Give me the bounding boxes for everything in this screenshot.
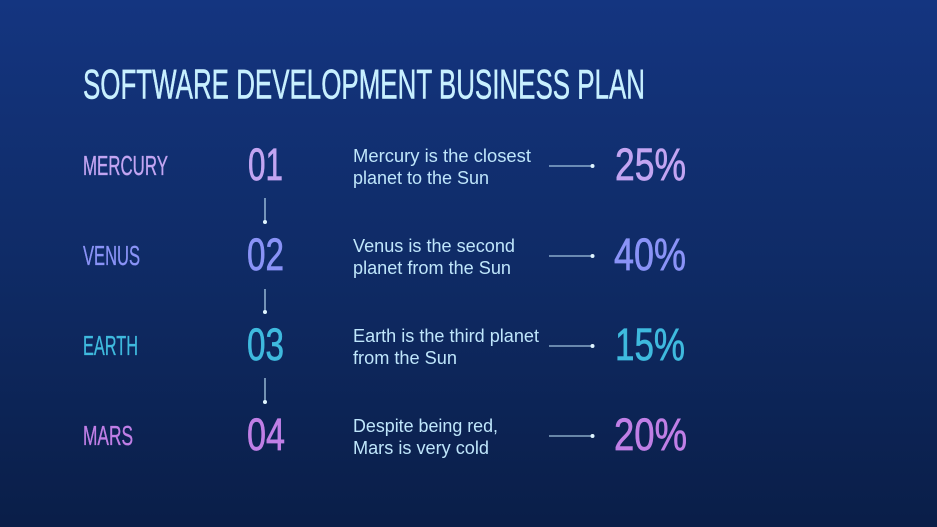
arrow: Earth	[549, 344, 594, 348]
description: Mars: Despite being red,	[353, 416, 498, 436]
row: Mars	[83, 409, 687, 460]
description: Mercury: planet to the Sun	[353, 168, 489, 188]
label: Mars: MARS	[83, 420, 133, 451]
label: Mercury: MERCURY	[83, 150, 168, 181]
description: Mercury: Mercury is the closest	[353, 146, 531, 166]
description: Mars: Mars is very cold	[353, 438, 489, 458]
description: Venus: planet from the Sun	[353, 258, 511, 278]
arrow: Mercury	[549, 164, 594, 168]
percent 25%: 25%	[615, 139, 686, 190]
description: Earth: from the Sun	[353, 348, 457, 368]
number 02: 02	[247, 229, 284, 280]
description: Earth: Earth is the third planet	[353, 326, 539, 346]
row: Earth	[83, 319, 685, 370]
description: Venus: Venus is the second	[353, 236, 515, 256]
row: Mercury	[83, 139, 686, 190]
row: Venus	[83, 229, 686, 280]
connector 02 to 03	[263, 289, 267, 314]
number 03: 03	[247, 319, 284, 370]
connector 01 to 02	[263, 198, 267, 224]
number 01: 01	[248, 139, 283, 190]
label: Venus: VENUS	[83, 240, 140, 271]
arrow: Mars	[549, 434, 594, 438]
label: Earth: EARTH	[83, 330, 138, 361]
percent 40%: 40%	[614, 229, 686, 280]
arrow: Venus	[549, 254, 594, 258]
number 04: 04	[247, 409, 285, 460]
percent 15%: 15%	[615, 319, 685, 370]
percent 20%: 20%	[614, 409, 687, 460]
connector 03 to 04	[263, 378, 267, 404]
